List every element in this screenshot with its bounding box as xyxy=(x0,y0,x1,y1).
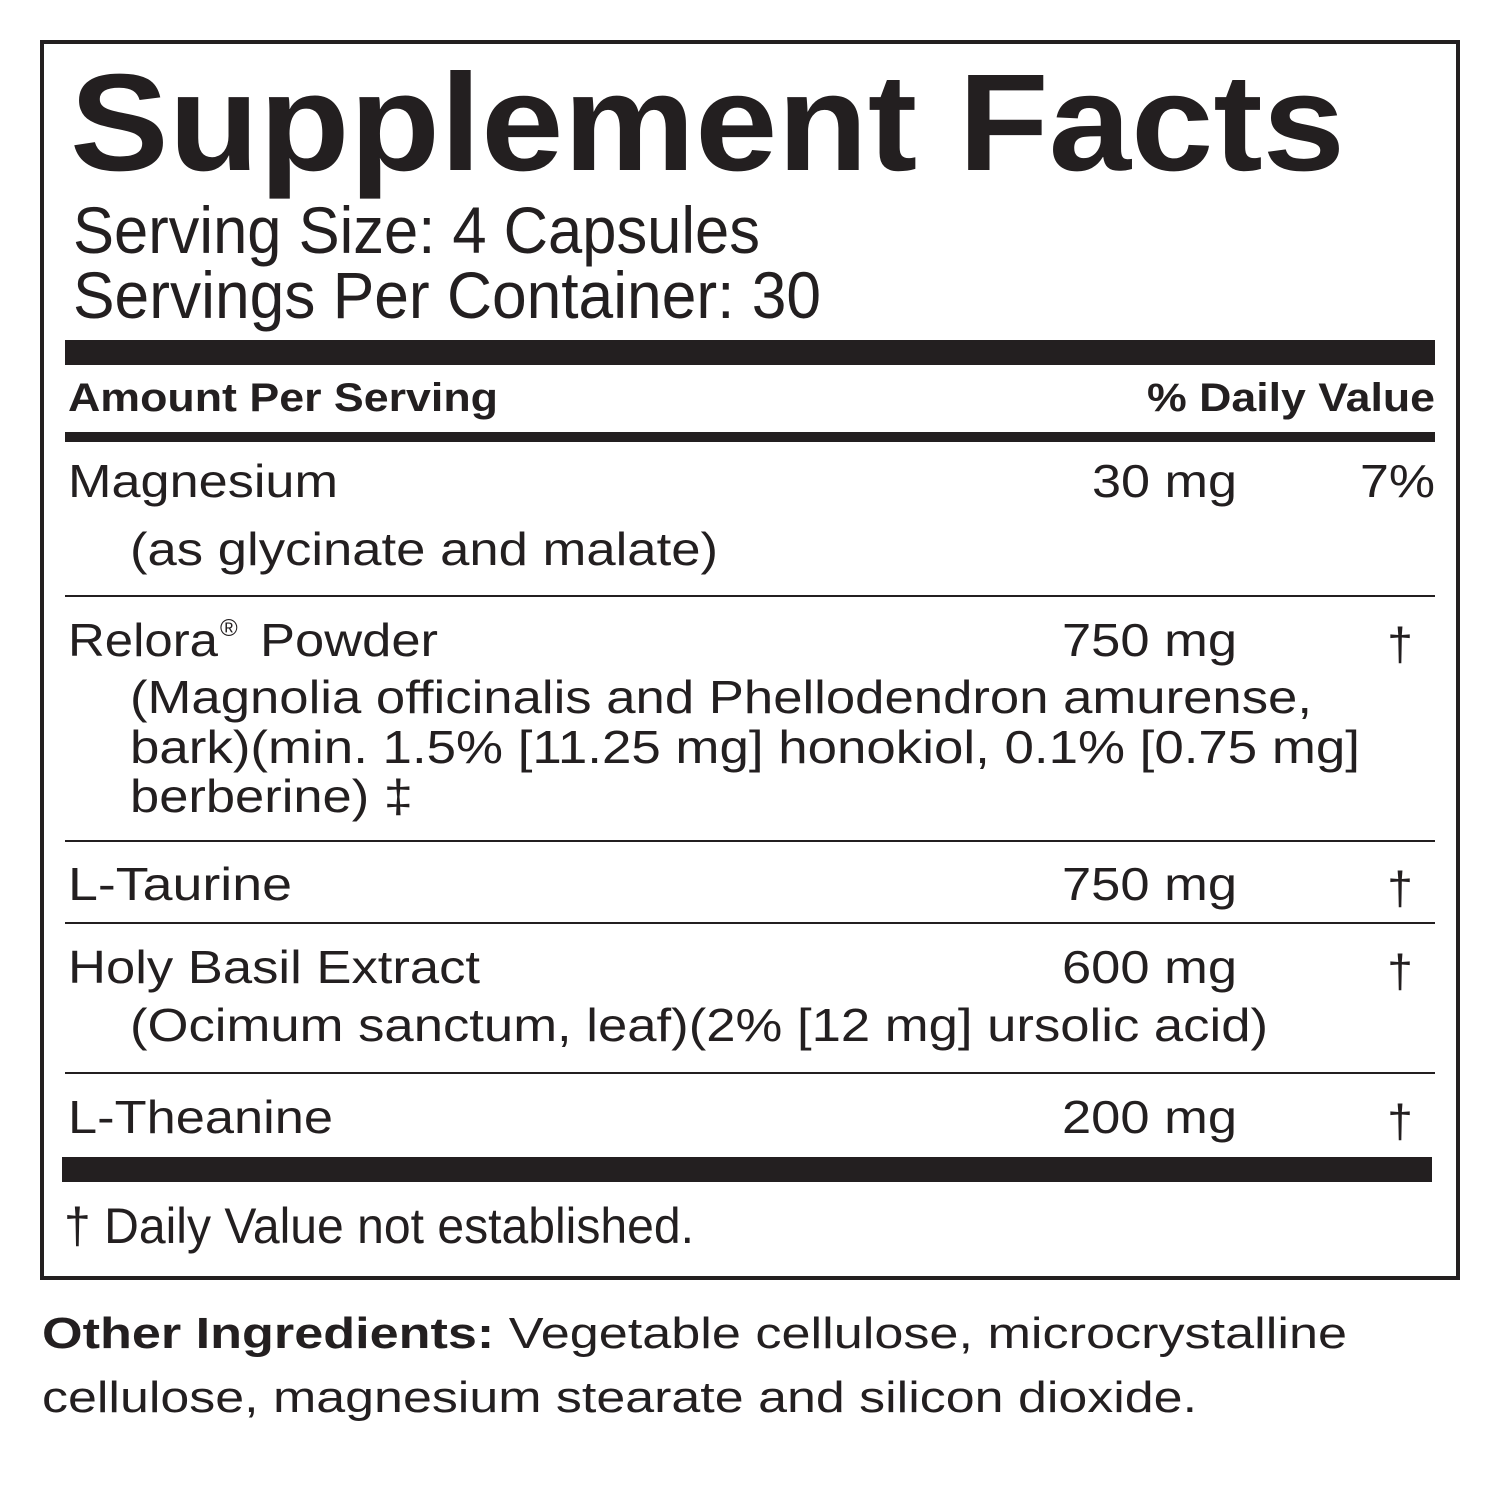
row: magnesium: (as glycinate and malate) xyxy=(130,523,718,575)
row: relora: ® xyxy=(220,615,238,642)
row: relora: berberine) ‡ xyxy=(130,770,413,822)
other ingredients xyxy=(42,1309,1347,1422)
row: l-taurine xyxy=(68,858,1413,914)
row: relora: bark)(min. 1.5% [11.25 mg] honokiol, 0.1% [0.75 mg] xyxy=(130,721,1360,773)
row: l-taurine: † xyxy=(1387,862,1413,914)
row: holy basil: Holy Basil Extract xyxy=(68,941,480,993)
row: l-taurine: L-Taurine xyxy=(68,858,292,910)
row: holy basil: 600 mg xyxy=(1062,941,1237,993)
title: Supplement Facts xyxy=(70,46,1345,200)
row: magnesium xyxy=(68,455,1435,575)
row: relora: Powder xyxy=(260,614,438,666)
other ingredients: Other Ingredients: Vegetable cellulose, microcrystalline xyxy=(42,1309,1347,1358)
column headers: Amount Per Serving xyxy=(68,376,498,420)
row: relora: (Magnolia officinalis and Phellodendron amurense, xyxy=(130,671,1312,723)
row: holy basil: (Ocimum sanctum, leaf)(2% [12 mg] ursolic acid) xyxy=(130,999,1268,1051)
row: l-taurine: 750 mg xyxy=(1062,858,1237,910)
row: magnesium: 7% xyxy=(1360,455,1435,507)
row: l-theanine: 200 mg xyxy=(1062,1091,1237,1143)
row: l-theanine xyxy=(68,1091,1413,1147)
row: holy basil: † xyxy=(1387,945,1413,997)
serving info: Serving Size: 4 Capsules xyxy=(73,193,760,267)
other ingredients: cellulose, magnesium stearate and silicon dioxide. xyxy=(42,1373,1197,1422)
column headers xyxy=(68,376,1435,420)
row: relora: † xyxy=(1387,618,1413,670)
row: holy basil xyxy=(68,941,1413,1051)
serving info xyxy=(73,193,821,332)
panel: supplement facts box xyxy=(42,42,1458,1278)
column headers: % Daily Value xyxy=(1147,376,1435,420)
row: magnesium: Magnesium xyxy=(68,455,338,507)
serving info: Servings Per Container: 30 xyxy=(73,258,821,332)
row: magnesium: 30 mg xyxy=(1092,455,1237,507)
footnote: † Daily Value not established. xyxy=(64,1198,694,1254)
row: relora xyxy=(68,614,1413,822)
row: relora: Relora xyxy=(68,614,218,666)
row: relora: 750 mg xyxy=(1062,614,1237,666)
row: l-theanine: L-Theanine xyxy=(68,1091,333,1143)
row: l-theanine: † xyxy=(1387,1095,1413,1147)
